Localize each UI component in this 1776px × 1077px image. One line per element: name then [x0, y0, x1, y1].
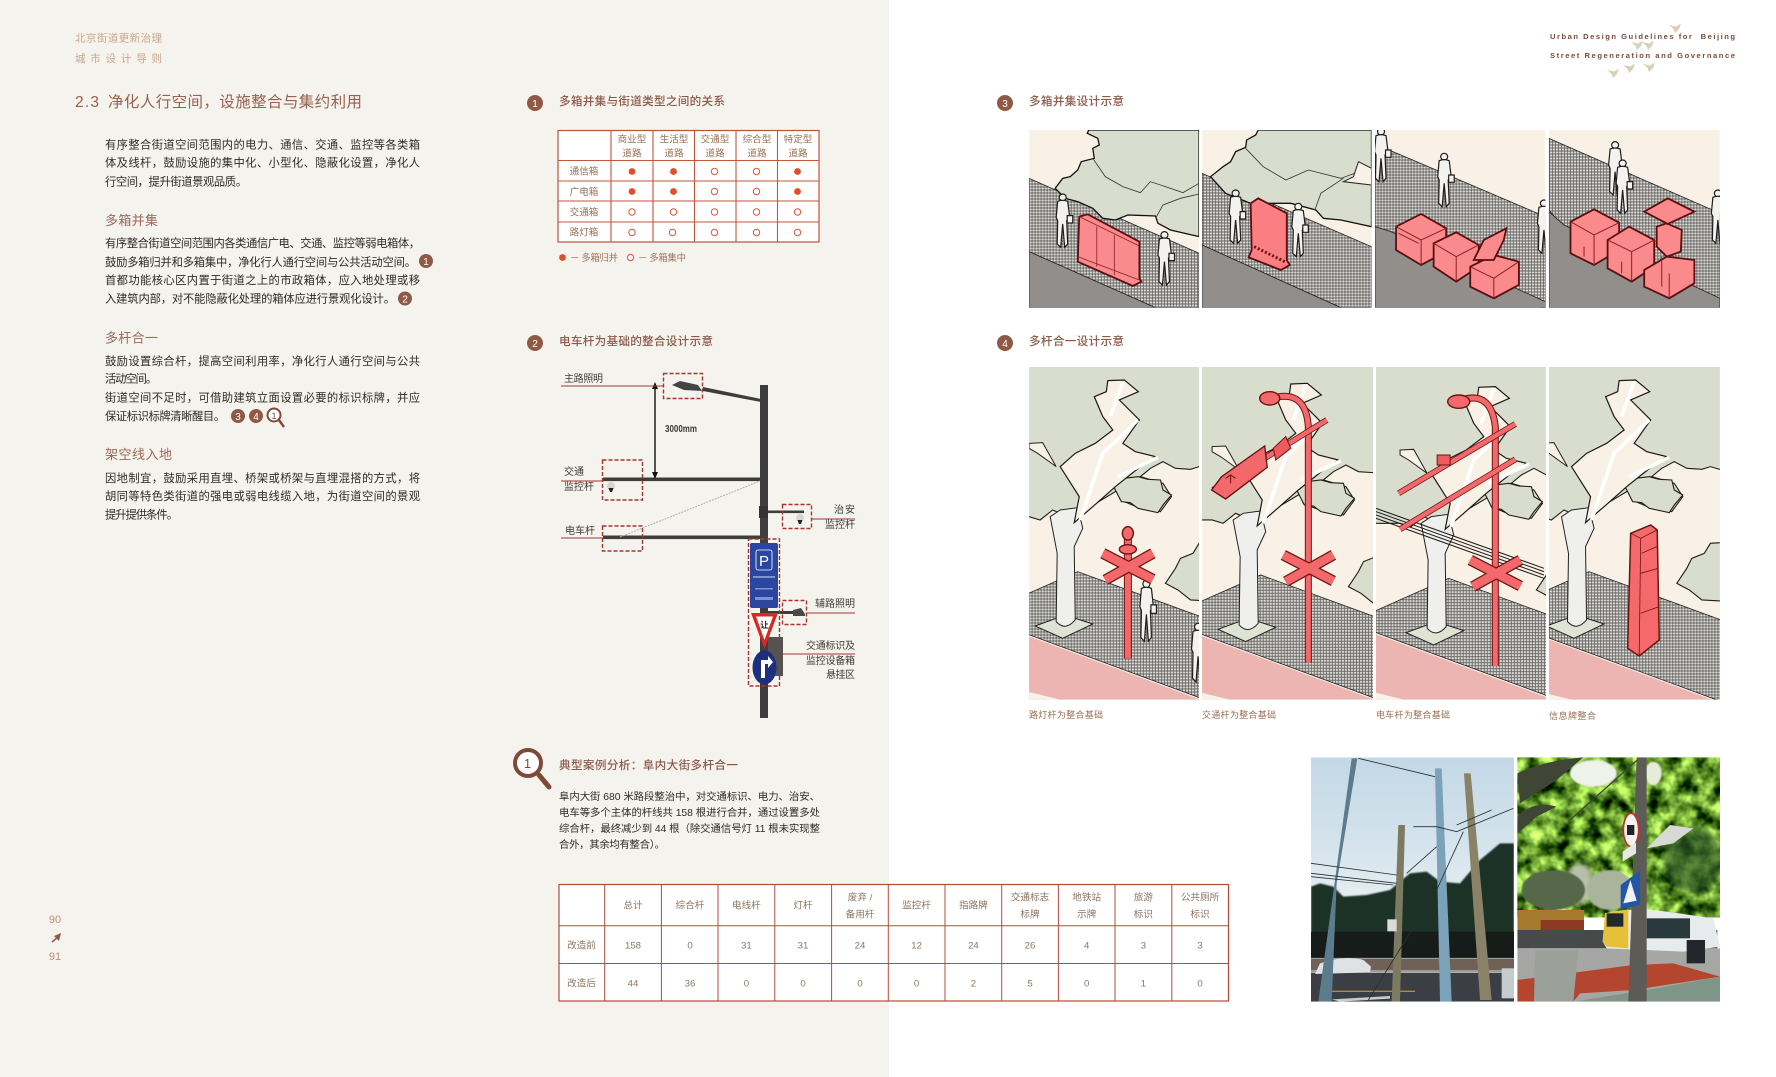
badge 2 and heading: 电车杆为基础的整合设计示意	[559, 334, 713, 348]
paragraph: 多杆合一 with badges: 1	[271, 411, 277, 421]
heading: 架空线入地: 架空线入地	[105, 447, 172, 462]
diagram: integrated pole	[561, 372, 855, 718]
table: poles before and after: 4	[1084, 940, 1090, 952]
captions under pole illustrations	[1029, 709, 1596, 721]
table: poles before and after: 2	[971, 978, 976, 990]
section title: 2.3	[75, 94, 99, 111]
table: poles before and after: 0	[744, 978, 749, 990]
badge 1 and heading: 1	[532, 99, 538, 110]
table: poles before and after: 备用杆	[846, 908, 875, 920]
table: poles before and after: 3	[1197, 940, 1203, 952]
icon: case study magnifier: 1	[524, 756, 531, 771]
panel: street light base	[1029, 367, 1200, 700]
table: poles before and after: 废弃 /	[848, 892, 873, 904]
badge 1 and heading	[527, 94, 725, 111]
diagram: integrated pole: 电车杆	[565, 524, 595, 537]
table: poles before and after: 0	[1084, 978, 1089, 990]
diagram: integrated pole: P	[759, 553, 769, 570]
table: poles before and after: 灯杆	[793, 900, 813, 912]
captions under pole illustrations: 电车杆为整合基础	[1376, 709, 1450, 720]
table: poles before and after: 标牌	[1020, 908, 1040, 920]
section title: 净化人行空间，设施整合与集约利用	[108, 93, 362, 111]
illustrations: box integration row	[1029, 128, 1728, 308]
paragraph: 多箱并集 with badges: 鼓励多箱归并和多箱集中，净化行人通行空间与公共活动空间。	[105, 255, 416, 269]
illustrations: pole integration row	[1029, 367, 1720, 700]
table: poles before and after: 44	[628, 978, 639, 990]
table: poles before and after: 24	[968, 940, 979, 952]
paragraph: 多箱并集 with badges	[105, 236, 433, 306]
table: poles before and after: 0	[857, 978, 863, 990]
table: poles before and after: 公共厕所	[1181, 892, 1220, 904]
diagram: integrated pole: 监控杆	[825, 518, 855, 531]
case study paragraph: 电车等多个主体的杆线共 158 根进行合并，通过设置多处	[559, 806, 821, 819]
diagram: integrated pole: 主路照明	[564, 372, 603, 385]
panel: tram pole base	[1376, 367, 1546, 700]
running header: book title: 城 市 设 计 导 则	[75, 52, 162, 65]
heading: 多杆合一: 多杆合一	[105, 330, 158, 346]
badge 3 and heading	[997, 94, 1124, 111]
photos of Funei street	[1311, 757, 1723, 1002]
panel: traffic pole base	[1202, 367, 1373, 700]
table: poles before and after: 0	[1197, 978, 1203, 990]
badge 2 and heading: 2	[532, 339, 538, 350]
page numbers with arrow: 90	[49, 914, 61, 926]
table: poles before and after: 改造前	[567, 940, 596, 952]
panel: three separated boxes	[1374, 128, 1554, 308]
badge 4 and heading: 4	[1002, 339, 1008, 350]
paragraph: 多杆合一 with badges	[105, 354, 420, 427]
diagram: integrated pole: 悬挂区	[826, 668, 855, 681]
badge 4 and heading: 多杆合一设计示意	[1029, 334, 1124, 348]
paragraph: 架空线入地: 胡同等特色类街道的强电或弱电线缆入地，为街道空间的景观	[105, 489, 420, 503]
paragraph: 多箱并集 with badges: 1	[423, 257, 429, 268]
table: box types vs street types: 商业型	[618, 134, 647, 146]
table: box types vs street types: 综合型	[743, 134, 772, 146]
table: box types vs street types: 交通箱	[570, 206, 599, 218]
panel: large single cabinet	[1029, 130, 1199, 308]
diagram: integrated pole: 3000mm	[665, 423, 697, 435]
table: poles before and after: 5	[1027, 978, 1033, 990]
table: poles before and after: 总计	[623, 900, 643, 912]
badge 2 and heading	[527, 334, 713, 351]
badge 3 and heading: 多箱并集设计示意	[1029, 94, 1124, 108]
panel: slim cabinet	[1202, 130, 1371, 308]
table: box types vs street types: 道路	[788, 148, 808, 160]
intro paragraph: 体及线杆，鼓励设施的集中化、小型化、隐蔽化设置，净化人	[105, 156, 420, 170]
table: poles before and after: 改造后	[567, 978, 596, 990]
captions under pole illustrations: 路灯杆为整合基础	[1029, 709, 1103, 720]
page numbers with arrow	[49, 914, 61, 963]
table: poles before and after: 监控杆	[902, 900, 931, 912]
diagram: integrated pole: 治安	[834, 503, 855, 516]
paragraph: 多杆合一 with badges: 街道空间不足时，可借助建筑立面设置必要的标识标牌，并应	[105, 390, 420, 404]
photo: poles before integration	[1311, 757, 1514, 1002]
captions under pole illustrations: 信息牌整合	[1549, 710, 1596, 721]
heading: 多箱并集: 多箱并集	[105, 213, 158, 228]
running header: book title: 北京街道更新治理	[75, 32, 162, 44]
panel: information totem	[1548, 367, 1720, 700]
diagram: integrated pole: 让	[760, 620, 769, 630]
paragraph: 多箱并集 with badges: 入建筑内部，对不能隐蔽化处理的箱体应进行景观化设计。	[105, 292, 395, 306]
paragraph: 架空线入地: 提升提供条件。	[105, 508, 178, 522]
table: box types vs street types: 交通型	[701, 134, 730, 146]
intro paragraph: 行空间，提升街道景观品质。	[105, 174, 247, 188]
table legend: － 多箱集中	[638, 252, 686, 263]
diagram: integrated pole: 交通标识及	[806, 639, 855, 652]
table: box types vs street types: 生活型	[660, 134, 689, 146]
page numbers with arrow: 91	[49, 951, 61, 963]
table: poles before and after: 标识	[1134, 908, 1153, 920]
paragraph: 多箱并集 with badges: 2	[402, 294, 408, 306]
badge 1 and heading: 多箱并集与街道类型之间的关系	[559, 94, 725, 108]
table: poles before and after: 31	[741, 940, 752, 952]
photo: pole with signs and bus	[1517, 757, 1723, 1002]
case study paragraph: 综合杆，最终减少到 44 根（除交通信号灯 11 根未实现整	[559, 822, 820, 835]
table: box types vs street types: 道路	[622, 148, 642, 160]
table: box types vs street types: 特定型	[784, 134, 813, 146]
diagram: integrated pole: 监控杆	[564, 480, 594, 493]
paragraph: 架空线入地: 因地制宜，鼓励采用直埋、桥架或桥架与直埋混搭的方式，将	[105, 471, 420, 485]
table: box types vs street types	[558, 130, 819, 242]
icon: case study magnifier	[515, 750, 549, 787]
table legend	[559, 252, 686, 263]
table: box types vs street types: 道路	[705, 148, 725, 160]
table: poles before and after	[559, 884, 1228, 1001]
table: box types vs street types: 路灯箱	[570, 226, 599, 238]
table: poles before and after: 电线杆	[732, 900, 761, 912]
table: poles before and after: 旅游	[1134, 892, 1153, 904]
table: poles before and after: 31	[798, 940, 808, 952]
table: poles before and after: 示牌	[1077, 908, 1097, 920]
diagram: integrated pole: 监控设备箱	[806, 654, 855, 667]
intro paragraph: 有序整合街道空间范围内的电力、通信、交通、监控等各类箱	[105, 138, 420, 152]
diagram: integrated pole: 交通	[564, 465, 584, 478]
paragraph: 架空线入地	[105, 471, 420, 522]
paragraph: 多杆合一 with badges: 3	[235, 412, 241, 423]
running header: English title with birds: Street Regeneration and Governance	[1550, 51, 1735, 60]
table: box types vs street types: 通信箱	[570, 166, 599, 178]
table: poles before and after: 0	[800, 978, 806, 990]
running header: English title with birds: Urban Design Guidelines for Beijing	[1550, 32, 1735, 41]
table: poles before and after: 地铁站	[1072, 892, 1101, 904]
table: poles before and after: 3	[1141, 940, 1146, 952]
paragraph: 多杆合一 with badges: 活动空间。	[105, 372, 157, 386]
table: poles before and after: 1	[1141, 978, 1146, 990]
table: box types vs street types: 道路	[664, 148, 684, 160]
table: box types vs street types: 广电箱	[570, 186, 599, 198]
case study paragraph: 阜内大街 680 米路段整治中，对交通标识、电力、治安、	[559, 790, 820, 803]
case study paragraph: 合外，其余均有整合）。	[559, 838, 665, 851]
running header: book title	[75, 32, 162, 65]
table: poles before and after: 0	[914, 978, 919, 990]
table: poles before and after: 158	[625, 940, 641, 952]
panel: four separated boxes	[1549, 130, 1728, 308]
running header: English title with birds	[1550, 24, 1735, 78]
case study paragraph	[559, 790, 821, 851]
table legend: － 多箱归并	[570, 252, 618, 263]
table: poles before and after: 36	[685, 978, 695, 990]
table: poles before and after: 标识	[1190, 908, 1210, 920]
paragraph: 多箱并集 with badges: 首都功能核心区内置于街道之上的市政箱体，应入地处理或移	[105, 273, 420, 287]
table: poles before and after: 12	[911, 940, 922, 952]
table: poles before and after: 指路牌	[959, 900, 988, 912]
intro paragraph	[105, 138, 420, 188]
table: poles before and after: 26	[1025, 940, 1035, 952]
badge 3 and heading: 3	[1002, 99, 1008, 110]
paragraph: 多杆合一 with badges: 鼓励设置综合杆，提高空间利用率，净化行人通行空间与公共	[105, 354, 420, 368]
case study heading: 典型案例分析：阜内大街多杆合一	[559, 758, 738, 772]
table: poles before and after: 交通标志	[1011, 892, 1050, 904]
table: poles before and after: 24	[855, 940, 866, 952]
table: box types vs street types: 道路	[747, 148, 767, 160]
diagram: integrated pole: 辅路照明	[815, 597, 855, 610]
paragraph: 多杆合一 with badges: 保证标识标牌清晰醒目。	[105, 409, 225, 423]
paragraph: 多杆合一 with badges: 4	[253, 412, 259, 423]
badge 4 and heading	[997, 334, 1124, 351]
table: poles before and after: 综合杆	[676, 900, 705, 912]
table: poles before and after: 0	[687, 940, 693, 952]
paragraph: 多箱并集 with badges: 有序整合街道空间范围内各类通信广电、交通、监控等弱电箱体，	[105, 236, 420, 250]
captions under pole illustrations: 交通杆为整合基础	[1202, 709, 1276, 720]
